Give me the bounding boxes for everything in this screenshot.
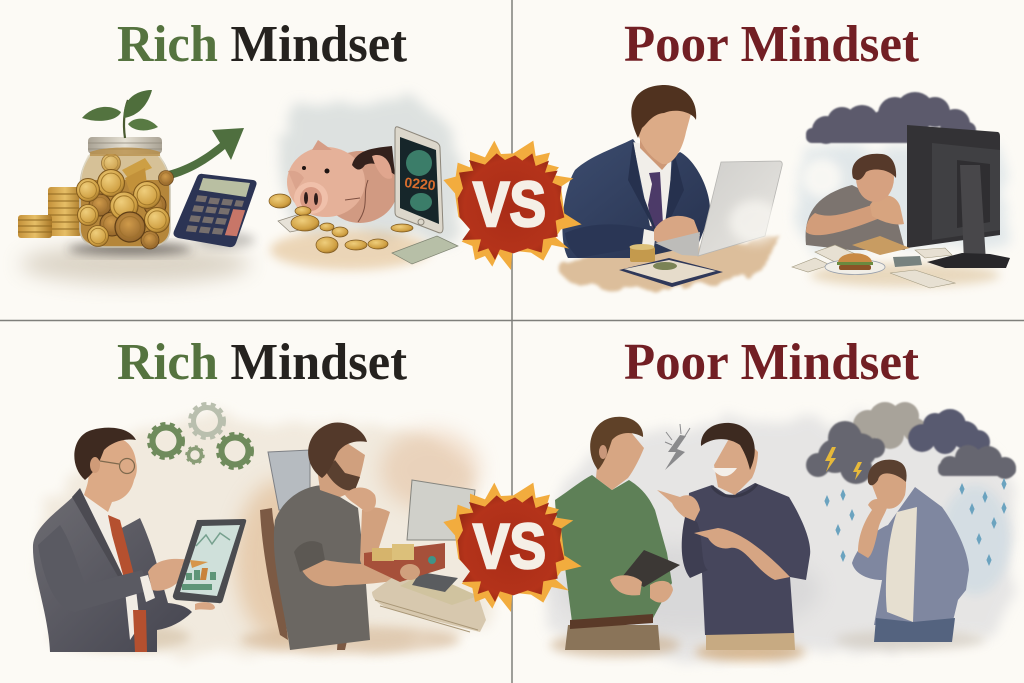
jeans bbox=[874, 618, 955, 642]
arm and hand at face bbox=[858, 499, 888, 558]
ear bbox=[90, 457, 100, 473]
illustration: man in grey suit bbox=[33, 428, 192, 652]
shirt bbox=[80, 490, 140, 640]
arm bbox=[806, 204, 880, 235]
head bbox=[870, 462, 906, 509]
hair bbox=[852, 154, 896, 180]
heading: poor mindset: Poor Mindset bbox=[624, 16, 920, 73]
illustration: man eating burger bbox=[806, 154, 905, 250]
panel: rich mindset bottom left bbox=[33, 334, 490, 655]
panel: rich mindset top left bbox=[18, 16, 462, 284]
illustration: sad man in hoodie bbox=[852, 460, 969, 642]
panel: poor mindset bottom right bbox=[538, 334, 1017, 661]
icon: book bbox=[622, 550, 680, 587]
panel: poor mindset top right bbox=[559, 16, 1010, 290]
icon: arrow bbox=[168, 128, 244, 179]
hair bbox=[701, 423, 755, 470]
illustration: man laughing and pointing bbox=[657, 423, 810, 650]
icon: laptop bbox=[655, 161, 782, 256]
vs burst bottom: VS bbox=[473, 512, 546, 582]
table wash bbox=[810, 263, 1000, 287]
neck and face bbox=[84, 438, 137, 512]
icon: grey lightning bbox=[665, 424, 690, 470]
upper hand pointing bbox=[657, 490, 700, 522]
hair bbox=[631, 85, 696, 138]
background wash bbox=[36, 417, 490, 655]
raised arm bbox=[360, 507, 390, 571]
desk wash bbox=[559, 234, 778, 290]
icon: calculator bbox=[174, 174, 257, 247]
hand under tablet bbox=[195, 602, 215, 610]
sleeve bbox=[565, 224, 650, 258]
illustration: man in suit at laptop bbox=[562, 85, 710, 258]
hands holding book bbox=[610, 575, 673, 603]
icon: left monitor bbox=[268, 450, 310, 510]
hair bbox=[74, 428, 136, 480]
ground wash bbox=[20, 232, 255, 284]
pants bbox=[706, 630, 795, 650]
t-shirt bbox=[886, 507, 917, 622]
icon: tablet with charts bbox=[173, 519, 246, 603]
hand at chin bbox=[345, 488, 376, 512]
illustration: man in t-shirt bbox=[274, 423, 415, 650]
hoodie bbox=[852, 487, 969, 625]
hair bbox=[868, 460, 907, 485]
suit bbox=[562, 139, 710, 258]
icon: yellow lightning bolts bbox=[825, 447, 862, 480]
icon: rain drops bbox=[824, 478, 1007, 566]
icon: food tray bbox=[852, 236, 910, 255]
illustration: man in green shirt bbox=[555, 417, 672, 650]
icon: smartphone: 0220 bbox=[404, 174, 437, 193]
heading: rich mindset: Rich Mindset bbox=[117, 334, 408, 391]
hand on box bbox=[400, 564, 420, 580]
icon: smartphone bbox=[395, 127, 443, 233]
heading: rich mindset: Rich Mindset bbox=[117, 16, 408, 73]
arm bbox=[38, 525, 150, 612]
glasses bbox=[100, 458, 134, 474]
icon: storm cloud bbox=[806, 402, 1016, 484]
vs burst bottom bbox=[443, 483, 582, 612]
smile bbox=[712, 468, 737, 476]
pants bbox=[565, 625, 660, 650]
t-shirt bbox=[806, 185, 905, 250]
background wash bbox=[538, 418, 1017, 661]
icon: sprout bbox=[82, 90, 158, 138]
icon: right monitor bbox=[407, 480, 475, 540]
tie bbox=[108, 515, 147, 652]
ground wash: orange bbox=[270, 230, 430, 270]
heading: poor mindset: Poor Mindset bbox=[624, 334, 920, 391]
belt bbox=[570, 614, 653, 629]
icon: jar of coins bbox=[76, 137, 174, 249]
head bbox=[856, 154, 894, 202]
lapel bbox=[72, 488, 125, 580]
hair bbox=[308, 423, 367, 478]
lower arm bbox=[298, 545, 415, 586]
neck and face bbox=[318, 435, 365, 497]
icon: burger on plate bbox=[825, 253, 885, 274]
blue wash behind man bbox=[799, 145, 1006, 250]
shirt bbox=[555, 475, 672, 622]
icon: clipboard bbox=[619, 258, 723, 287]
neck and face bbox=[640, 125, 680, 170]
icon: chair bbox=[260, 508, 355, 650]
t-shirt bbox=[274, 485, 370, 650]
sweater bbox=[685, 483, 810, 635]
white splash bbox=[802, 158, 842, 198]
icon: monitor back bbox=[907, 125, 1010, 268]
arm sweater bbox=[682, 517, 708, 578]
lower hand pointing and forearm bbox=[694, 528, 790, 580]
icon: cracked piggy bank bbox=[287, 140, 398, 223]
icon: desk with paper stack bbox=[372, 572, 486, 632]
neck and face bbox=[596, 425, 644, 490]
icon: dark cloud bbox=[806, 92, 976, 144]
hand pointing bbox=[148, 559, 190, 591]
icon: box of cash bbox=[364, 543, 445, 582]
icon: tin can bbox=[630, 244, 655, 262]
icon: gears bbox=[149, 404, 252, 468]
icon: papers bbox=[792, 245, 955, 288]
icon: scattered coins and bills bbox=[269, 194, 458, 264]
suit bbox=[33, 492, 192, 652]
vs burst top bbox=[443, 141, 582, 270]
hands bbox=[654, 216, 700, 244]
neck and face bbox=[714, 428, 758, 495]
ear bbox=[599, 445, 607, 459]
background wash: grey-blue bbox=[277, 98, 462, 240]
icon: coin stacks bbox=[18, 187, 82, 238]
vs burst top: VS bbox=[473, 170, 546, 240]
beard bbox=[325, 460, 360, 491]
hair bbox=[590, 417, 643, 470]
shirt and tie bbox=[633, 142, 672, 228]
collar bbox=[712, 484, 757, 496]
icon: small box bbox=[893, 256, 922, 267]
